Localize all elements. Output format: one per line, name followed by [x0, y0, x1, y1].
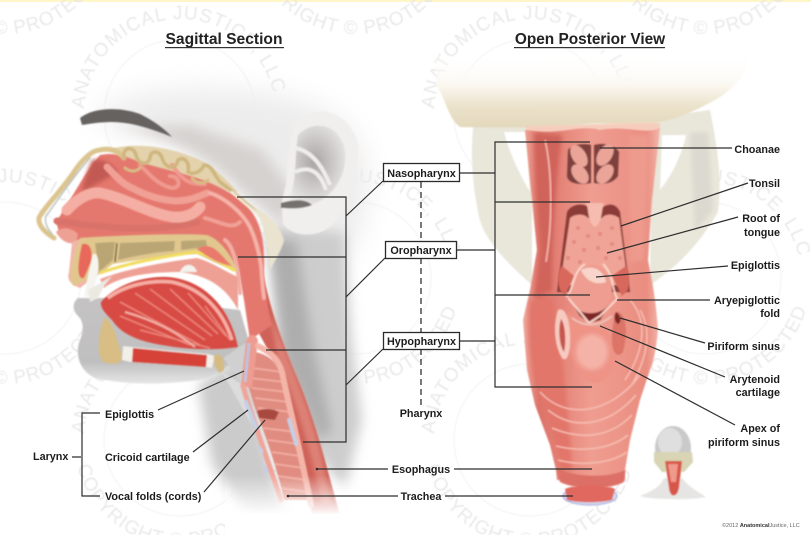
tongue — [101, 277, 238, 349]
label: Cricoid cartilage: Cricoid cartilage — [105, 452, 190, 464]
mouth and chin skin — [74, 298, 250, 384]
label: Larynx: Larynx — [33, 451, 68, 463]
epiglottis (sagittal) — [241, 335, 258, 388]
soft palate top edge — [525, 123, 660, 132]
label: Aryepiglottic fold: Aryepiglottic — [714, 295, 780, 307]
illustration: open posterior view — [436, 50, 752, 505]
label: Aryepiglottic fold: fold — [760, 308, 780, 320]
deep cavity shadow — [82, 160, 118, 192]
label: Epiglottis (posterior) — [596, 260, 780, 277]
label: Aryepiglottic fold — [617, 295, 780, 320]
head skin shading — [90, 89, 368, 520]
nasal cavity and upper pharynx — [56, 154, 272, 340]
label: Tonsil — [621, 178, 780, 226]
watermark seals: ANATOMICAL JUSTICE, LLC — [720, 170, 810, 254]
label: Arytenoid cartilage: Arytenoid — [730, 374, 780, 386]
watermark seals: COPYRIGHT © PROTECTED — [364, 307, 454, 384]
title: open posterior view: Open Posterior View — [515, 31, 665, 48]
label: Apex of piriform sinus — [615, 361, 780, 449]
label: Esophagus: Esophagus — [392, 464, 450, 476]
watermark seals: ANATOMICAL JUSTICE, LLC — [260, 170, 460, 252]
bottom fade of neck — [225, 475, 355, 515]
title: sagittal section: Sagittal Section — [166, 31, 282, 48]
mandible left — [472, 120, 532, 285]
oropharyngeal opening and tongue — [557, 203, 630, 292]
nasal bone and cranial base — [39, 149, 276, 238]
watermark seals: ANATOMICAL JUSTICE, LLC — [72, 378, 104, 434]
label: Vocal folds (cords): Vocal folds (cords) — [105, 491, 202, 503]
skull base bone — [436, 50, 752, 128]
label: Oropharynx: Oropharynx — [390, 245, 452, 257]
watermark seals: ANATOMICAL JUSTICE, LLC — [422, 334, 525, 434]
right lateral wall — [628, 135, 650, 262]
nostril tissue — [56, 228, 78, 243]
watermark seals: ANATOMICAL JUSTICE, LLC — [72, 6, 285, 108]
esophagus lower cuff — [557, 468, 625, 488]
copyright note: ©2012 AnatomicalJustice, LLC — [722, 522, 800, 529]
watermark seals: COPYRIGHT © PROTECTED — [651, 307, 804, 384]
trachea stump — [563, 485, 617, 505]
mandible and floor of mouth — [99, 317, 252, 425]
posterior wall darker side — [534, 133, 562, 298]
label: Apex of piriform sinus: piriform sinus — [708, 437, 780, 449]
choanae — [567, 141, 619, 187]
label: Root of tongue: Root of — [742, 213, 780, 225]
label: Hypopharynx: Hypopharynx — [387, 336, 456, 348]
label: Vocal folds (cords) — [105, 420, 265, 503]
label: Nasopharynx — [384, 164, 460, 182]
upper lip — [68, 239, 96, 288]
label: Arytenoid cartilage — [600, 326, 780, 399]
soft wall tissue near spine — [254, 207, 284, 270]
leader bracket: left pharynx regions — [237, 181, 385, 442]
eyebrow — [80, 109, 172, 137]
label: Hypopharynx — [384, 332, 460, 350]
epiglottis — [558, 264, 629, 323]
label: Cricoid cartilage — [105, 410, 248, 464]
mandible right — [650, 110, 720, 285]
hard palate — [71, 234, 238, 286]
watermark seals: ANATOMICAL JUSTICE, LLC — [422, 6, 627, 108]
esophagus and posterior wall — [240, 268, 340, 515]
larynx bracket — [33, 413, 100, 496]
label: Nasopharynx: Nasopharynx — [387, 168, 456, 180]
label: Trachea: Trachea — [401, 491, 442, 503]
front wall with cartilages — [243, 386, 281, 500]
circular folds — [540, 300, 647, 463]
cranial base tan tissue — [108, 146, 238, 192]
nasal turbinates — [57, 165, 264, 298]
label: Arytenoid cartilage: cartilage — [736, 387, 780, 399]
leader bracket: right pharynx regions — [456, 142, 592, 387]
label: Choanae: Choanae — [734, 144, 780, 156]
ear — [281, 111, 358, 235]
teeth — [84, 254, 112, 302]
top pale yellow edge — [0, 0, 811, 2]
pharynx dashed axis — [420, 182, 422, 407]
lower pharynx shading — [529, 300, 572, 470]
label: Root of tongue — [607, 213, 780, 253]
label: Epiglottis (sagittal): Epiglottis — [105, 409, 154, 421]
label: Tonsil: Tonsil — [749, 178, 780, 190]
posterior larynx ridge — [258, 346, 311, 505]
laryngeal mound and piriform recesses — [555, 309, 626, 383]
label: Piriform sinus: Piriform sinus — [707, 341, 780, 353]
soft tissue under palate and molar — [100, 258, 238, 310]
tongue papillae — [564, 226, 624, 274]
pharynx outer shell — [523, 127, 660, 480]
label: Pharynx: Pharynx — [400, 408, 442, 420]
label: Epiglottis (sagittal) — [105, 371, 244, 421]
label: Apex of piriform sinus: Apex of — [740, 423, 780, 435]
illustration: sagittal section of the head and neck — [39, 89, 368, 535]
label: Epiglottis (posterior): Epiglottis — [731, 260, 780, 272]
larynx and trachea lumen — [248, 352, 310, 500]
label: Oropharynx — [386, 242, 456, 258]
inset head thumbnail — [640, 426, 706, 499]
label: Piriform sinus — [620, 318, 780, 353]
label: Root of tongue: tongue — [744, 227, 780, 239]
